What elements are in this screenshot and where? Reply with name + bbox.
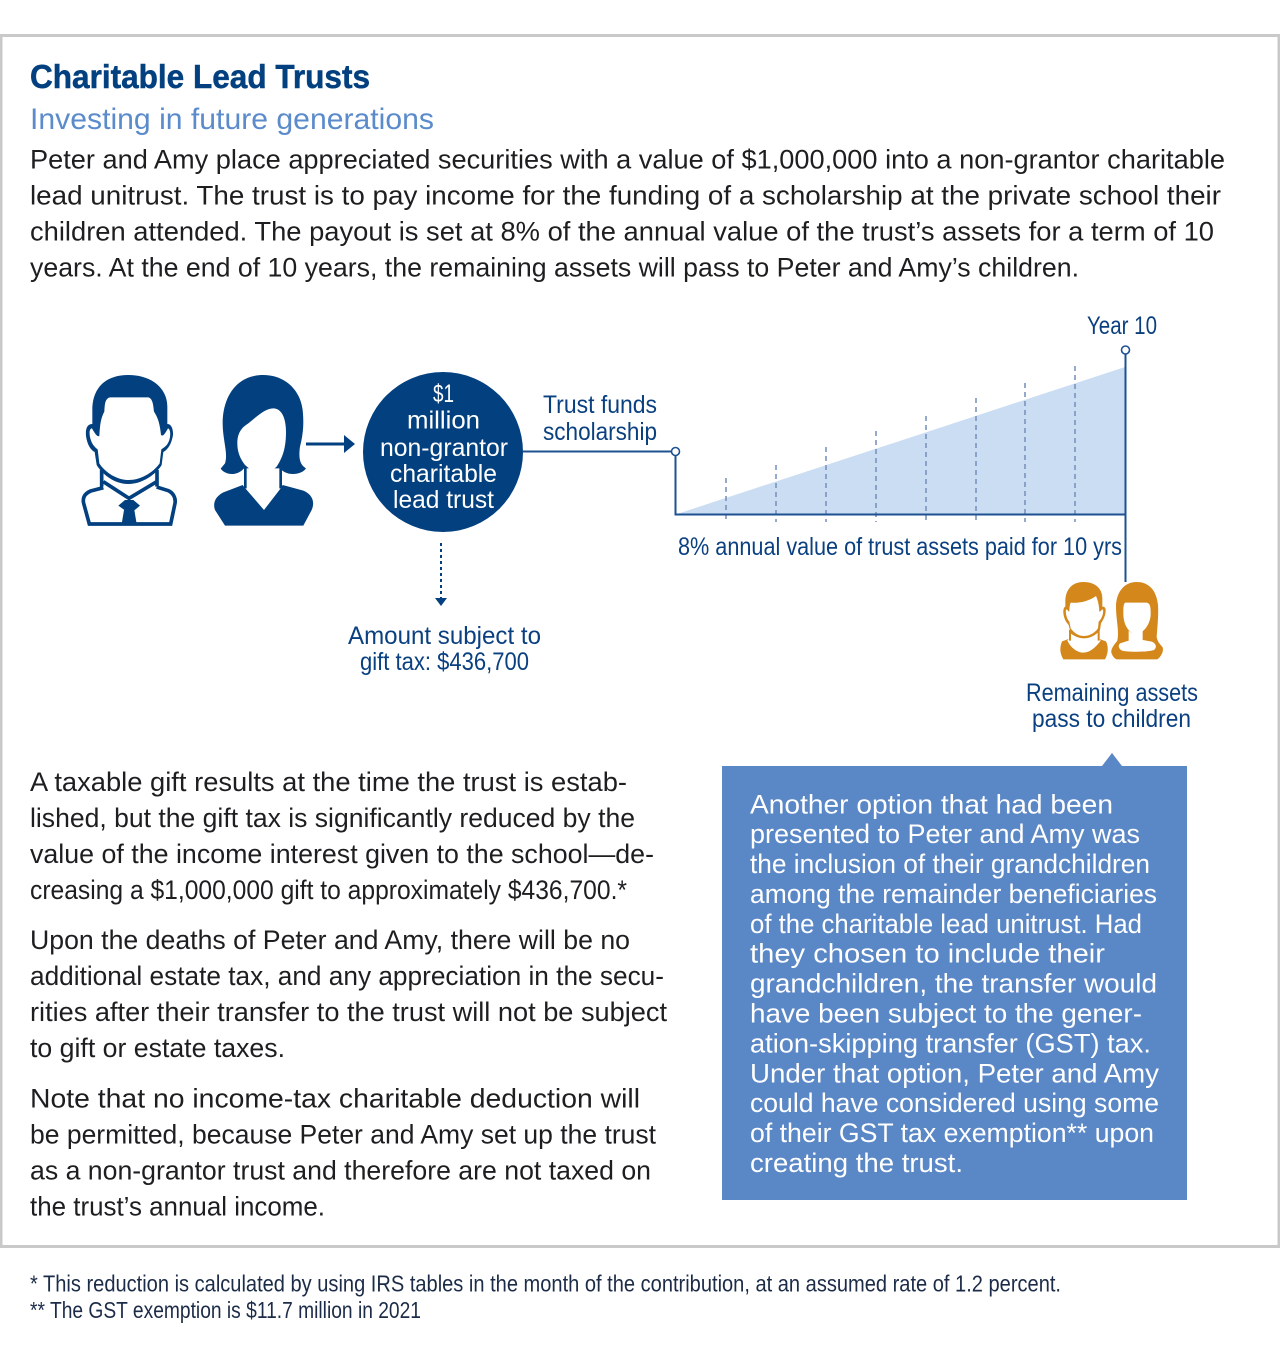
footnotes xyxy=(30,1270,1061,1323)
icon: son xyxy=(1060,582,1108,659)
icon: woman xyxy=(214,375,313,526)
text block: estate tax explanation xyxy=(30,925,667,1063)
callout: grandchildren option: Under that option, Peter and Amy xyxy=(750,1058,1160,1088)
label: gift tax amount xyxy=(348,622,541,676)
callout: grandchildren option: they chosen to include their xyxy=(750,939,1105,969)
label: remaining assets: pass to children xyxy=(1032,705,1191,733)
callout: grandchildren option xyxy=(722,753,1187,1200)
footnotes: * This reduction is calculated by using IRS tables in the month of the contribution, at an assumed rate of 1.2 percent. xyxy=(30,1270,1061,1296)
trust circle: lead trust xyxy=(393,486,494,514)
intro text block: lead unitrust. The trust is to pay income for the funding of a scholarship at the private school their xyxy=(30,180,1221,210)
text block: income tax note: be permitted, because Peter and Amy set up the trust xyxy=(30,1120,656,1150)
trust circle: non-grantor xyxy=(380,434,508,462)
callout: grandchildren option: of their GST tax exemption** upon xyxy=(750,1118,1154,1148)
arrow: couple to trust xyxy=(306,435,355,453)
text block: estate tax explanation: to gift or estate taxes. xyxy=(30,1033,285,1063)
icon: daughter xyxy=(1111,582,1163,659)
callout: grandchildren option: grandchildren, the transfer would xyxy=(750,969,1157,999)
label: chart caption: 8% annual value of trust assets paid for 10 yrs xyxy=(678,533,1122,561)
intro text block: Peter and Amy place appreciated securities with a value of $1,000,000 into a non-grantor charitable xyxy=(30,144,1225,174)
chart: growing annual payout wedge xyxy=(523,346,1130,582)
icon: man xyxy=(83,375,175,524)
text block: estate tax explanation: additional estate tax, and any appreciation in the secu- xyxy=(30,961,664,991)
label: gift tax amount: gift tax: $436,700 xyxy=(360,648,529,676)
arrow: dotted to gift tax xyxy=(435,543,447,606)
label: remaining assets: Remaining assets xyxy=(1026,679,1198,707)
text block: income tax note: as a non-grantor trust and therefore are not taxed on xyxy=(30,1156,651,1186)
intro text block: years. At the end of 10 years, the remaining assets will pass to Peter and Amy’s children. xyxy=(30,252,1079,282)
text block: estate tax explanation: rities after their transfer to the trust will not be subject xyxy=(30,997,667,1027)
text block: gift tax explanation: value of the income interest given to the school—de- xyxy=(30,839,654,869)
text block: gift tax explanation: A taxable gift results at the time the trust is estab- xyxy=(30,767,627,797)
text block: income tax note xyxy=(30,1084,656,1222)
icon: children xyxy=(1060,582,1163,659)
intro text block: children attended. The payout is set at 8% of the annual value of the trust’s assets for a term of 10 xyxy=(30,216,1214,246)
text block: gift tax explanation: lished, but the gift tax is significantly reduced by the xyxy=(30,803,635,833)
callout: grandchildren option: have been subject to the gener- xyxy=(750,998,1142,1028)
footnotes: ** The GST exemption is $11.7 million in 2021 xyxy=(30,1297,421,1323)
label: trust funds scholarship: scholarship xyxy=(543,418,657,446)
text block: gift tax explanation xyxy=(30,767,654,905)
trust circle: charitable xyxy=(390,460,497,488)
trust circle: $1 xyxy=(433,380,454,408)
label: year 10: Year 10 xyxy=(1087,312,1157,340)
trust circle xyxy=(363,372,523,532)
text block: income tax note: Note that no income-tax charitable deduction will xyxy=(30,1084,640,1114)
callout: grandchildren option: creating the trust. xyxy=(750,1148,963,1178)
subtitle: Investing in future generations xyxy=(30,103,434,136)
label: trust funds scholarship: Trust funds xyxy=(543,391,657,419)
callout: grandchildren option: of the charitable lead unitrust. Had xyxy=(750,909,1142,939)
callout: grandchildren option: the inclusion of their grandchildren xyxy=(750,849,1150,879)
title: Charitable Lead Trusts xyxy=(30,58,370,95)
text block: estate tax explanation: Upon the deaths of Peter and Amy, there will be no xyxy=(30,925,630,955)
label: remaining assets xyxy=(1026,679,1198,733)
callout: grandchildren option: presented to Peter and Amy was xyxy=(750,819,1140,849)
text block: gift tax explanation: creasing a $1,000,000 gift to approximately $436,700.* xyxy=(30,875,627,905)
callout: grandchildren option: Another option that had been xyxy=(750,789,1113,819)
text block: income tax note: the trust’s annual income. xyxy=(30,1192,325,1222)
callout: grandchildren option: among the remainder beneficiaries xyxy=(750,879,1157,909)
intro text block xyxy=(30,144,1225,282)
label: trust funds scholarship xyxy=(543,391,657,446)
trust circle: million xyxy=(407,406,480,434)
label: gift tax amount: Amount subject to xyxy=(348,622,541,650)
callout: grandchildren option: could have considered using some xyxy=(750,1088,1159,1118)
callout: grandchildren option: ation-skipping transfer (GST) tax. xyxy=(750,1028,1151,1058)
